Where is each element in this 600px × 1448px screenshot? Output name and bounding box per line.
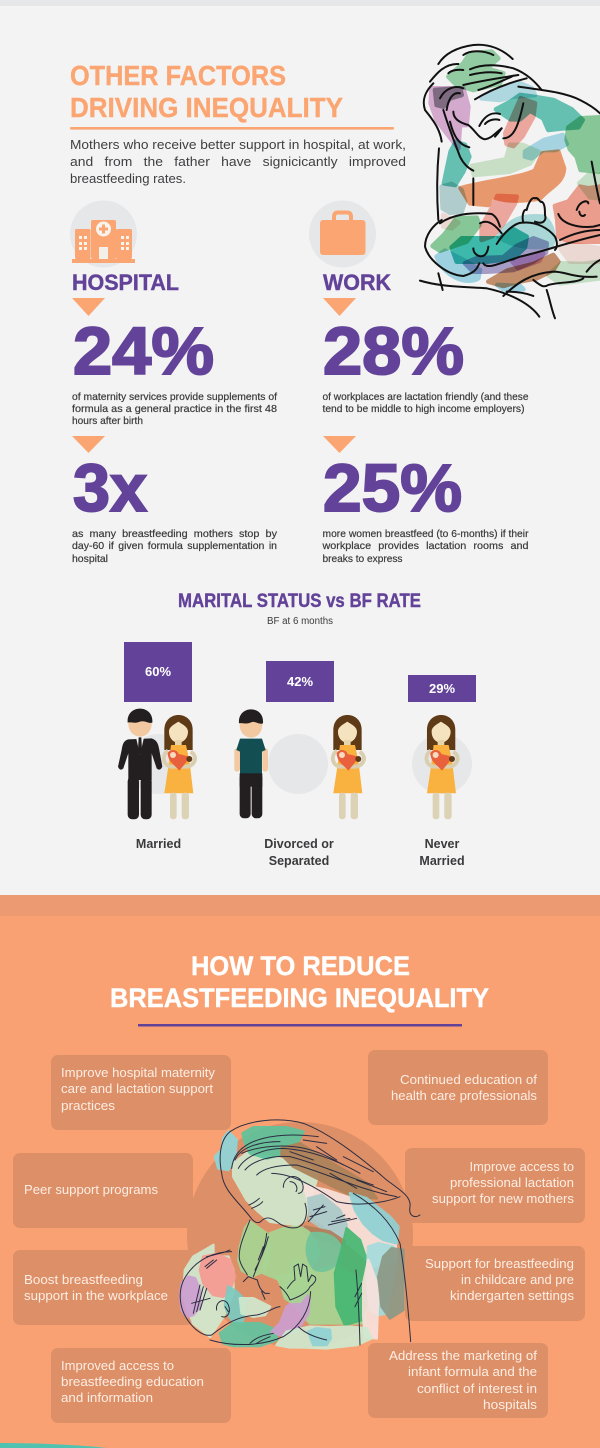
bar: 42% [266, 661, 334, 702]
box: marketing [368, 1343, 548, 1418]
text: 25% description: workplace provides lactation rooms and [321, 540, 529, 552]
box: lactation support: Improve access to [470, 1159, 574, 1174]
illustration: mother and baby line art [420, 45, 600, 318]
work column [309, 200, 529, 565]
title: OTHER FACTORS [70, 60, 286, 91]
intro text: and from the father have signicicantly improved [70, 154, 406, 169]
figure: married couple [118, 709, 195, 819]
box: workplace: support in the workplace [24, 1288, 168, 1303]
text: 3x description: day-60 if given formula supplementation in [72, 540, 277, 552]
heading: hospital: HOSPITAL [72, 270, 179, 295]
box: hospital care: practices [61, 1098, 116, 1113]
text: 25% description: breaks to express [322, 553, 402, 565]
box: childcare: in childcare and pre [461, 1272, 574, 1287]
box: hospital care [51, 1055, 231, 1130]
box: peer support: Peer support programs [24, 1182, 159, 1197]
title [70, 60, 343, 123]
stat: 28%: 28% [323, 314, 464, 389]
figure: single mother [412, 715, 472, 819]
box: professional education: health care professionals [391, 1088, 538, 1103]
box: lactation support: professional lactation [450, 1175, 574, 1190]
title [110, 951, 489, 1013]
illustration: mother and baby watercolor [180, 1120, 420, 1348]
box: hospital care: care and lactation support [61, 1081, 213, 1096]
label: never married: Married [419, 854, 465, 868]
box: workplace: Boost breastfeeding [24, 1272, 143, 1287]
panel: other factors [70, 45, 600, 565]
box: lactation support: support for new mothers [432, 1191, 574, 1206]
text: 3x description: as many breastfeeding mothers stop by [72, 528, 278, 540]
stat: 24%: 24% [73, 314, 214, 389]
icon: hospital [70, 200, 137, 268]
text: 24% description: formula as a general practice in the first 48 [72, 403, 277, 415]
label: divorced or separated [264, 837, 334, 868]
box: hospital care: Improve hospital maternity [61, 1065, 216, 1080]
box: lactation support [405, 1148, 585, 1223]
box: education access: Improved access to [61, 1358, 174, 1373]
box: education access: and information [61, 1390, 153, 1405]
panel background [0, 895, 600, 1448]
box: childcare [405, 1246, 585, 1321]
text: 28% description [322, 391, 529, 415]
title underline [138, 1024, 462, 1026]
box: professional education [368, 1050, 548, 1125]
box: childcare: kindergarten settings [450, 1288, 575, 1303]
bar: 29% [408, 675, 476, 702]
title: BREASTFEEDING INEQUALITY [110, 983, 489, 1013]
panel: marital status [118, 591, 476, 868]
title: DRIVING INEQUALITY [70, 92, 343, 123]
hospital column [70, 200, 278, 565]
text: 28% description: tend to be middle to high income employers) [322, 403, 524, 415]
box: marketing: conflict of interest in [417, 1381, 537, 1396]
box: education access: breastfeeding education [61, 1374, 204, 1389]
stat: 3x: 3x [73, 451, 147, 526]
title: HOW TO REDUCE [191, 951, 410, 981]
heading: work: WORK [323, 270, 391, 295]
label: divorced or separated: Divorced or [264, 837, 334, 851]
label: divorced or separated: Separated [269, 854, 329, 868]
text: 24% description: hours after birth [72, 415, 143, 427]
label: never married: Never [425, 837, 460, 851]
stat: 25%: 25% [323, 451, 462, 526]
arrow: hospital 2 [72, 436, 105, 453]
box: marketing: hospitals [483, 1397, 538, 1412]
box: marketing: Address the marketing of [389, 1348, 537, 1363]
bar: 60%: 60% [145, 664, 171, 679]
text: 3x description [72, 528, 278, 565]
arrow: hospital 1 [72, 298, 105, 316]
text: 3x description: hospital [72, 553, 108, 565]
box: marketing: infant formula and the [408, 1364, 537, 1379]
box: peer support [13, 1153, 193, 1228]
intro text [70, 137, 406, 186]
text: 24% description: of maternity services provide supplements of [72, 391, 277, 403]
text: 25% description: more women breastfeed (to 6-months) if their [322, 528, 529, 540]
box: childcare: Support for breastfeeding [425, 1256, 574, 1271]
backing circle [187, 1122, 413, 1348]
text: 24% description [72, 391, 277, 427]
intro text: breastfeeding rates. [70, 171, 186, 186]
bar: 29%: 29% [429, 681, 455, 696]
title underline [70, 127, 394, 130]
icon: briefcase [309, 200, 376, 268]
bottom teal accent [0, 1443, 107, 1448]
heading: marital status: MARITAL STATUS vs BF RATE [178, 591, 421, 612]
label: married: Married [136, 837, 181, 851]
bar: 60% [124, 642, 192, 702]
text: 25% description [321, 528, 529, 565]
box: workplace [13, 1250, 193, 1325]
panel: how to reduce [0, 895, 600, 1448]
bar: 42%: 42% [287, 674, 313, 689]
text: 28% description: of workplaces are lactation friendly (and these [322, 391, 529, 403]
label: never married [419, 837, 465, 868]
intro text: Mothers who receive better support in hospital, at work, [70, 137, 406, 152]
figure: divorced parents [234, 709, 364, 819]
arrow: work 2 [323, 436, 356, 453]
subheading: BF at 6 months [267, 616, 333, 627]
box: professional education: Continued education of [400, 1072, 537, 1087]
box: education access [51, 1348, 231, 1423]
arrow: work 1 [323, 298, 356, 316]
